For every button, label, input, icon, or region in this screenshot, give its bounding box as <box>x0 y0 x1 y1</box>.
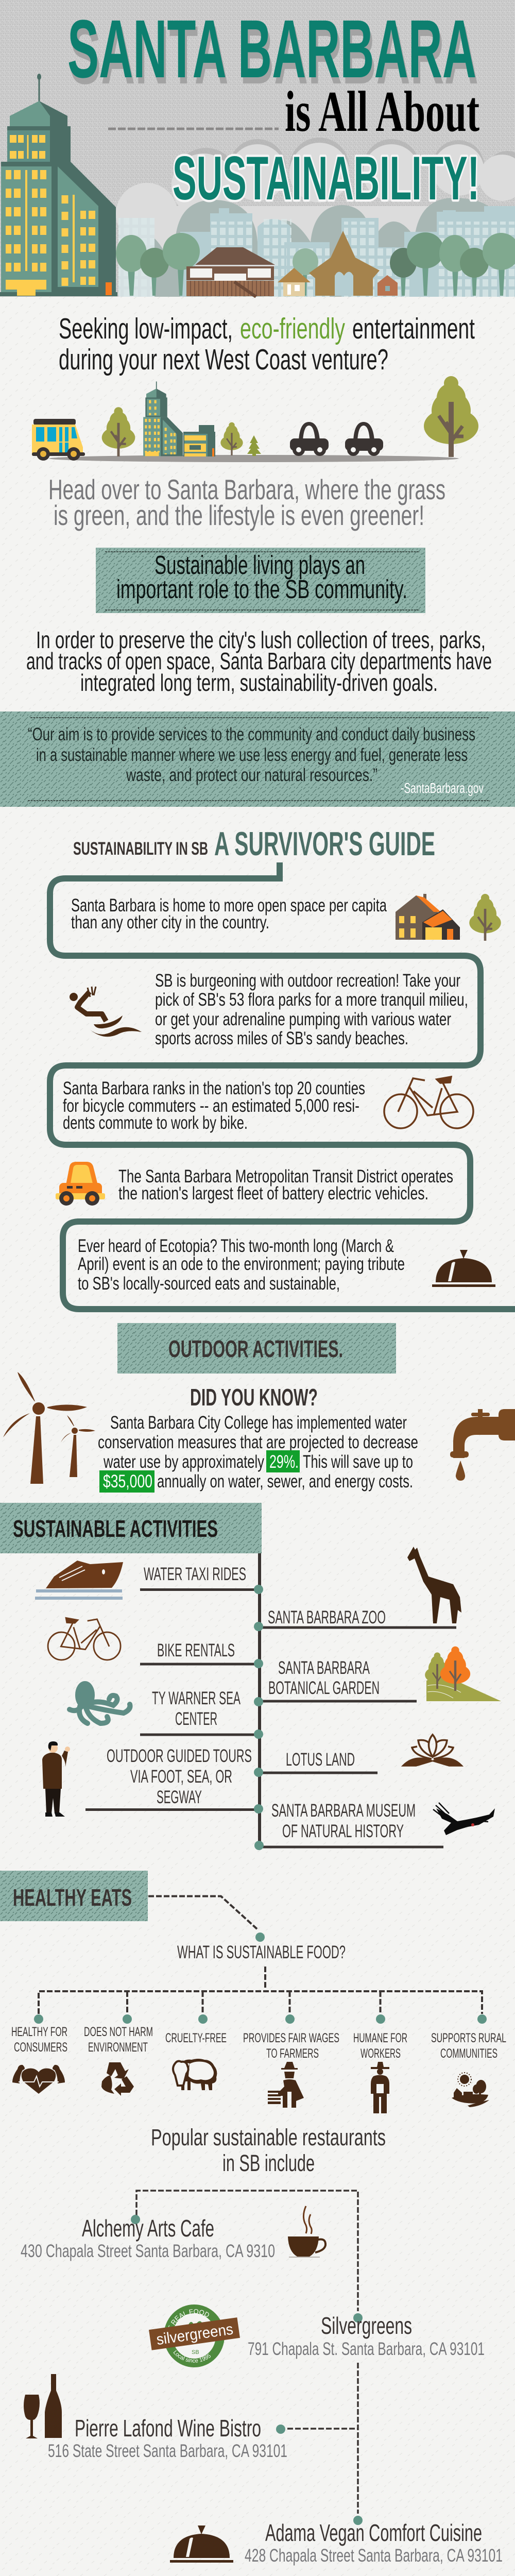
snake connector path <box>50 862 515 1309</box>
icon: farmer with crate <box>268 2062 304 2108</box>
text block: head over <box>48 473 445 531</box>
icon: small tree <box>220 422 243 455</box>
fact: electric vehicles <box>56 1162 453 1206</box>
panel: sustainable activities heading: SUSTAINABLE ACTIVITIES <box>13 1515 218 1542</box>
icon: worker <box>371 2062 389 2113</box>
item: humane for workers: HUMANE FOR <box>353 2031 407 2045</box>
activity: lotus land <box>286 1735 461 1770</box>
sustainable food tree: WHAT IS SUSTAINABLE FOOD? <box>177 1942 346 1962</box>
activity: bike rentals: BIKE RENTALS <box>157 1640 235 1660</box>
trees <box>116 232 515 296</box>
activity: water taxi: WATER TAXI RIDES <box>144 1564 246 1584</box>
panel: header <box>0 0 515 297</box>
restaurant: pierre lafond: Pierre Lafond Wine Bistro <box>75 2415 261 2442</box>
panel: healthy eats heading: HEALTHY EATS <box>13 1884 132 1911</box>
activity: sea center <box>70 1684 241 1729</box>
item: fair wages: PROVIDES FAIR WAGES <box>243 2031 339 2045</box>
logo: silvergreens: EAT REAL FOOD <box>168 2309 209 2327</box>
highlight: $35,000: $35,000 <box>103 1471 152 1492</box>
restaurant: pierre lafond <box>24 2374 287 2461</box>
activity: zoo <box>268 1547 461 1628</box>
item: does not harm environment: ENVIRONMENT <box>88 2040 148 2055</box>
item: fair wages: TO FARMERS <box>266 2046 319 2061</box>
icon: large tree <box>424 376 478 457</box>
text block: did you know: DID YOU KNOW? <box>190 1384 318 1411</box>
text block: seeking intro <box>59 312 475 376</box>
icon: tree <box>102 407 135 456</box>
mountains <box>122 198 515 297</box>
icon: bus <box>32 419 85 461</box>
text block: did you know: annually on water, sewer, and energy costs. <box>157 1471 413 1492</box>
logo: silvergreens <box>149 2304 240 2367</box>
restaurant: adama vegan <box>170 2519 503 2566</box>
icon: condor <box>433 1803 495 1835</box>
icon: car <box>345 422 383 456</box>
highlight: 29%: 29%. <box>269 1452 299 1472</box>
logo: silvergreens: Local since 1995 <box>173 2350 211 2363</box>
icon: wine glass and bottle <box>24 2374 62 2438</box>
fact: ecotopia: April) event is an ode to the environment; paying tribute <box>78 1254 405 1274</box>
decorative dashed lead line <box>108 128 279 130</box>
panel: city quote <box>0 711 515 807</box>
panel: city quote: waste, and protect our natural resources.” <box>126 765 377 785</box>
icon: garden hill <box>425 1647 501 1701</box>
restaurant: alchemy arts cafe: 430 Chapala Street Santa Barbara, CA 9310 <box>21 2241 275 2261</box>
icon: heart with arms <box>12 2065 65 2094</box>
illustration: street scene <box>32 376 478 462</box>
item: cruelty free: CRUELTY-FREE <box>165 2031 227 2045</box>
icon: houses <box>396 894 460 940</box>
fact: open space: Santa Barbara is home to more open space per capita <box>71 895 387 916</box>
activity: lotus land: LOTUS LAND <box>286 1750 355 1770</box>
activities timeline <box>35 1547 501 1850</box>
logo: silvergreens: silvergreens <box>156 2321 234 2348</box>
activity: water taxi <box>35 1561 246 1600</box>
fact: ecotopia <box>78 1236 495 1294</box>
activity: bike rentals <box>48 1618 235 1660</box>
panel: sustainable activities heading <box>0 1503 262 1553</box>
fact: ecotopia: to SB's locally-sourced eats and sustainable, <box>78 1274 340 1294</box>
icon: water tap <box>450 1409 515 1481</box>
fact: bicycle commuters: for bicycle commuters -- an estimated 5,000 resi- <box>63 1096 359 1116</box>
item: does not harm environment <box>84 2025 153 2096</box>
city skyline <box>118 206 515 297</box>
panel: sustainable living callout <box>96 548 425 613</box>
icon: car <box>290 422 329 456</box>
logo: silvergreens: SB <box>192 2349 199 2355</box>
fact: open space <box>71 894 501 941</box>
activity: sea center: CENTER <box>175 1709 217 1729</box>
item: fair wages <box>243 2031 339 2108</box>
icon: recycle leaf <box>101 2062 134 2096</box>
icon: bicycle <box>48 1618 121 1660</box>
large building <box>0 74 117 296</box>
fact: ecotopia: Ever heard of Ecotopia? This two-month long (March & <box>78 1236 394 1256</box>
fact: open space: than any other city in the country. <box>71 912 269 933</box>
restaurant: alchemy arts cafe <box>21 2206 325 2261</box>
panel: sustainable living callout: Sustainable living plays an <box>154 550 365 580</box>
restaurant: silvergreens <box>149 2304 485 2367</box>
brown house <box>186 247 275 297</box>
icon: bicycle <box>384 1077 473 1128</box>
text block: popular restaurants: Popular sustainable restaurants <box>151 2124 386 2150</box>
panel: outdoor activities heading: OUTDOOR ACTIVITIES. <box>168 1335 343 1362</box>
fact: outdoor recreation <box>70 971 468 1048</box>
activity: guided tours: VIA FOOT, SEA, OR <box>130 1767 232 1787</box>
restaurant: alchemy arts cafe: Alchemy Arts Cafe <box>82 2215 214 2242</box>
text block: popular restaurants <box>151 2124 386 2176</box>
tan houses <box>278 231 398 296</box>
icon: cloche <box>432 1250 495 1287</box>
icon: sheep <box>173 2059 217 2090</box>
text block: did you know: Santa Barbara City College has implemented water <box>110 1413 407 1433</box>
text block: did you know <box>98 1384 418 1493</box>
icon: orange car <box>56 1162 105 1206</box>
activity: guided tours: OUTDOOR GUIDED TOURS <box>107 1746 252 1766</box>
icon: ship <box>35 1561 123 1600</box>
text block: seeking intro: eco-friendly <box>240 312 345 345</box>
activity: guided tours: SEGWAY <box>157 1787 202 1807</box>
icon: lotus <box>403 1735 461 1766</box>
activity: guided tours <box>42 1741 252 1817</box>
activity: natural history museum: OF NATURAL HISTORY <box>282 1821 404 1841</box>
fact: bicycle commuters: dents commute to work by bike. <box>63 1113 248 1133</box>
activity: zoo: SANTA BARBARA ZOO <box>268 1607 386 1628</box>
item: does not harm environment: DOES NOT HARM <box>84 2025 153 2039</box>
icon: kitesurfer <box>70 987 142 1037</box>
activity: sea center: TY WARNER SEA <box>152 1688 241 1708</box>
highlight: $35,000 <box>99 1470 154 1493</box>
icon: tower <box>143 381 183 456</box>
dashed connector: restaurants <box>131 2191 363 2525</box>
activity: natural history museum: SANTA BARBARA MUSEUM <box>271 1801 416 1821</box>
item: healthy for consumers: CONSUMERS <box>14 2040 67 2055</box>
highlight: 29% <box>266 1450 300 1472</box>
item: rural communities <box>431 2031 506 2107</box>
icon: cloche <box>170 2526 233 2563</box>
text block: seeking intro: Seeking low-impact, <box>59 312 233 345</box>
activity: botanical garden <box>268 1647 501 1701</box>
icon: pine <box>247 435 261 456</box>
text block: did you know: This will save up to <box>303 1452 413 1472</box>
icon: tour guide <box>42 1741 70 1817</box>
fact: bicycle commuters: Santa Barbara ranks in the nation's top 20 counties <box>63 1078 365 1098</box>
cloud layer <box>116 138 515 297</box>
item: healthy for consumers <box>11 2025 67 2094</box>
item: healthy for consumers: HEALTHY FOR <box>11 2025 67 2039</box>
icon: low building <box>183 425 215 456</box>
activity: botanical garden: BOTANICAL GARDEN <box>268 1678 380 1698</box>
activity: natural history museum <box>271 1801 495 1841</box>
icon: coffee cup <box>288 2206 325 2258</box>
fact: electric vehicles: the nation's largest fleet of battery electric vehicles. <box>118 1183 428 1204</box>
icon: farm and sun <box>452 2073 489 2107</box>
fact: outdoor recreation: sports across miles of SB's sandy beaches. <box>155 1028 408 1048</box>
panel: outdoor activities heading <box>117 1323 396 1374</box>
activity: botanical garden: SANTA BARBARA <box>278 1658 370 1678</box>
item: cruelty free <box>165 2031 227 2090</box>
panel: healthy eats heading <box>0 1871 148 1921</box>
icon: octopus <box>70 1684 130 1723</box>
sustainable food tree <box>11 1933 506 2113</box>
icon: giraffe <box>407 1547 461 1623</box>
icon: tree <box>469 894 501 941</box>
restaurant: silvergreens: Silvergreens <box>321 2312 412 2339</box>
icon: wind turbines <box>3 1372 95 1484</box>
heading: survivor's guide: SUSTAINABILITY IN SB <box>73 839 208 859</box>
text block: popular restaurants: in SB include <box>222 2150 315 2176</box>
dashed arrow to sustainable food <box>148 1896 257 1929</box>
text block: did you know: water use by approximately <box>103 1452 264 1472</box>
fact: bicycle commuters <box>63 1077 473 1133</box>
item: humane for workers <box>353 2031 407 2113</box>
heading: survivor's guide <box>73 825 435 862</box>
restaurant: pierre lafond: 516 State Street Santa Barbara, CA 93101 <box>48 2441 287 2461</box>
item: humane for workers: WORKERS <box>360 2046 401 2061</box>
text block: preserve goals <box>26 626 492 696</box>
